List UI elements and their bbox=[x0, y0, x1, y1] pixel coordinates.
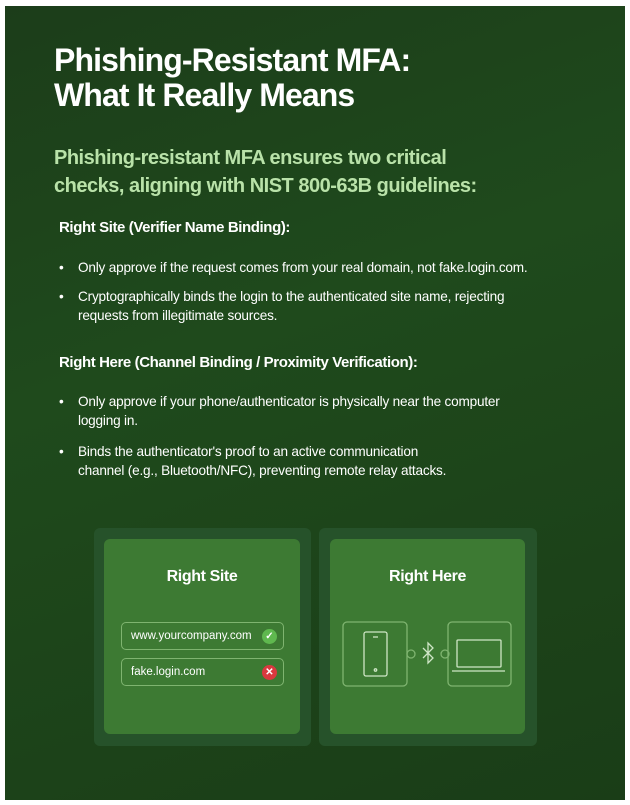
heading: right site: Right Site (Verifier Name Binding): bbox=[59, 219, 290, 236]
subtitle: checks, aligning with NIST 800-63B guidelines: bbox=[54, 175, 477, 197]
bullets: right here: channel (e.g., Bluetooth/NFC), preventing remote relay attacks. bbox=[78, 463, 446, 478]
bullets: right here: Only approve if your phone/authenticator is physically near the computer bbox=[78, 394, 500, 409]
subtitle: Phishing-resistant MFA ensures two critical bbox=[54, 147, 446, 169]
bullets: right here: logging in. bbox=[78, 413, 138, 428]
title: Phishing-Resistant MFA: bbox=[54, 42, 410, 78]
illustration container bbox=[94, 528, 537, 746]
field: real domain bbox=[121, 622, 284, 650]
bullets: right site: Only approve if the request comes from your real domain, not fake.login.com. bbox=[78, 260, 527, 275]
bullets: right site: requests from illegitimate sources. bbox=[78, 308, 277, 323]
subtitle bbox=[54, 147, 477, 197]
panel: right here bbox=[319, 528, 537, 746]
field: fake domain: fake.login.com bbox=[131, 666, 205, 678]
field: real domain: www.yourcompany.com bbox=[131, 630, 252, 642]
card title: right site: Right Site bbox=[167, 568, 237, 585]
title: What It Really Means bbox=[54, 77, 354, 113]
heading: right here: Right Here (Channel Binding / Proximity Verification): bbox=[59, 354, 417, 371]
bullets: right site: Cryptographically binds the login to the authenticated site name, rejecting bbox=[78, 289, 504, 304]
field: real domain: ✓ bbox=[265, 631, 274, 642]
bullets: right here bbox=[60, 394, 500, 478]
title bbox=[54, 42, 410, 113]
bullets: right here: Binds the authenticator's proof to an active communication bbox=[78, 444, 418, 459]
field: fake domain: ✕ bbox=[265, 667, 274, 678]
bullets: right site bbox=[60, 260, 527, 323]
icon: phone bluetooth laptop bbox=[342, 621, 512, 687]
panel: right site bbox=[94, 528, 311, 746]
field: fake domain bbox=[121, 658, 284, 686]
card title: right here: Right Here bbox=[389, 568, 466, 585]
